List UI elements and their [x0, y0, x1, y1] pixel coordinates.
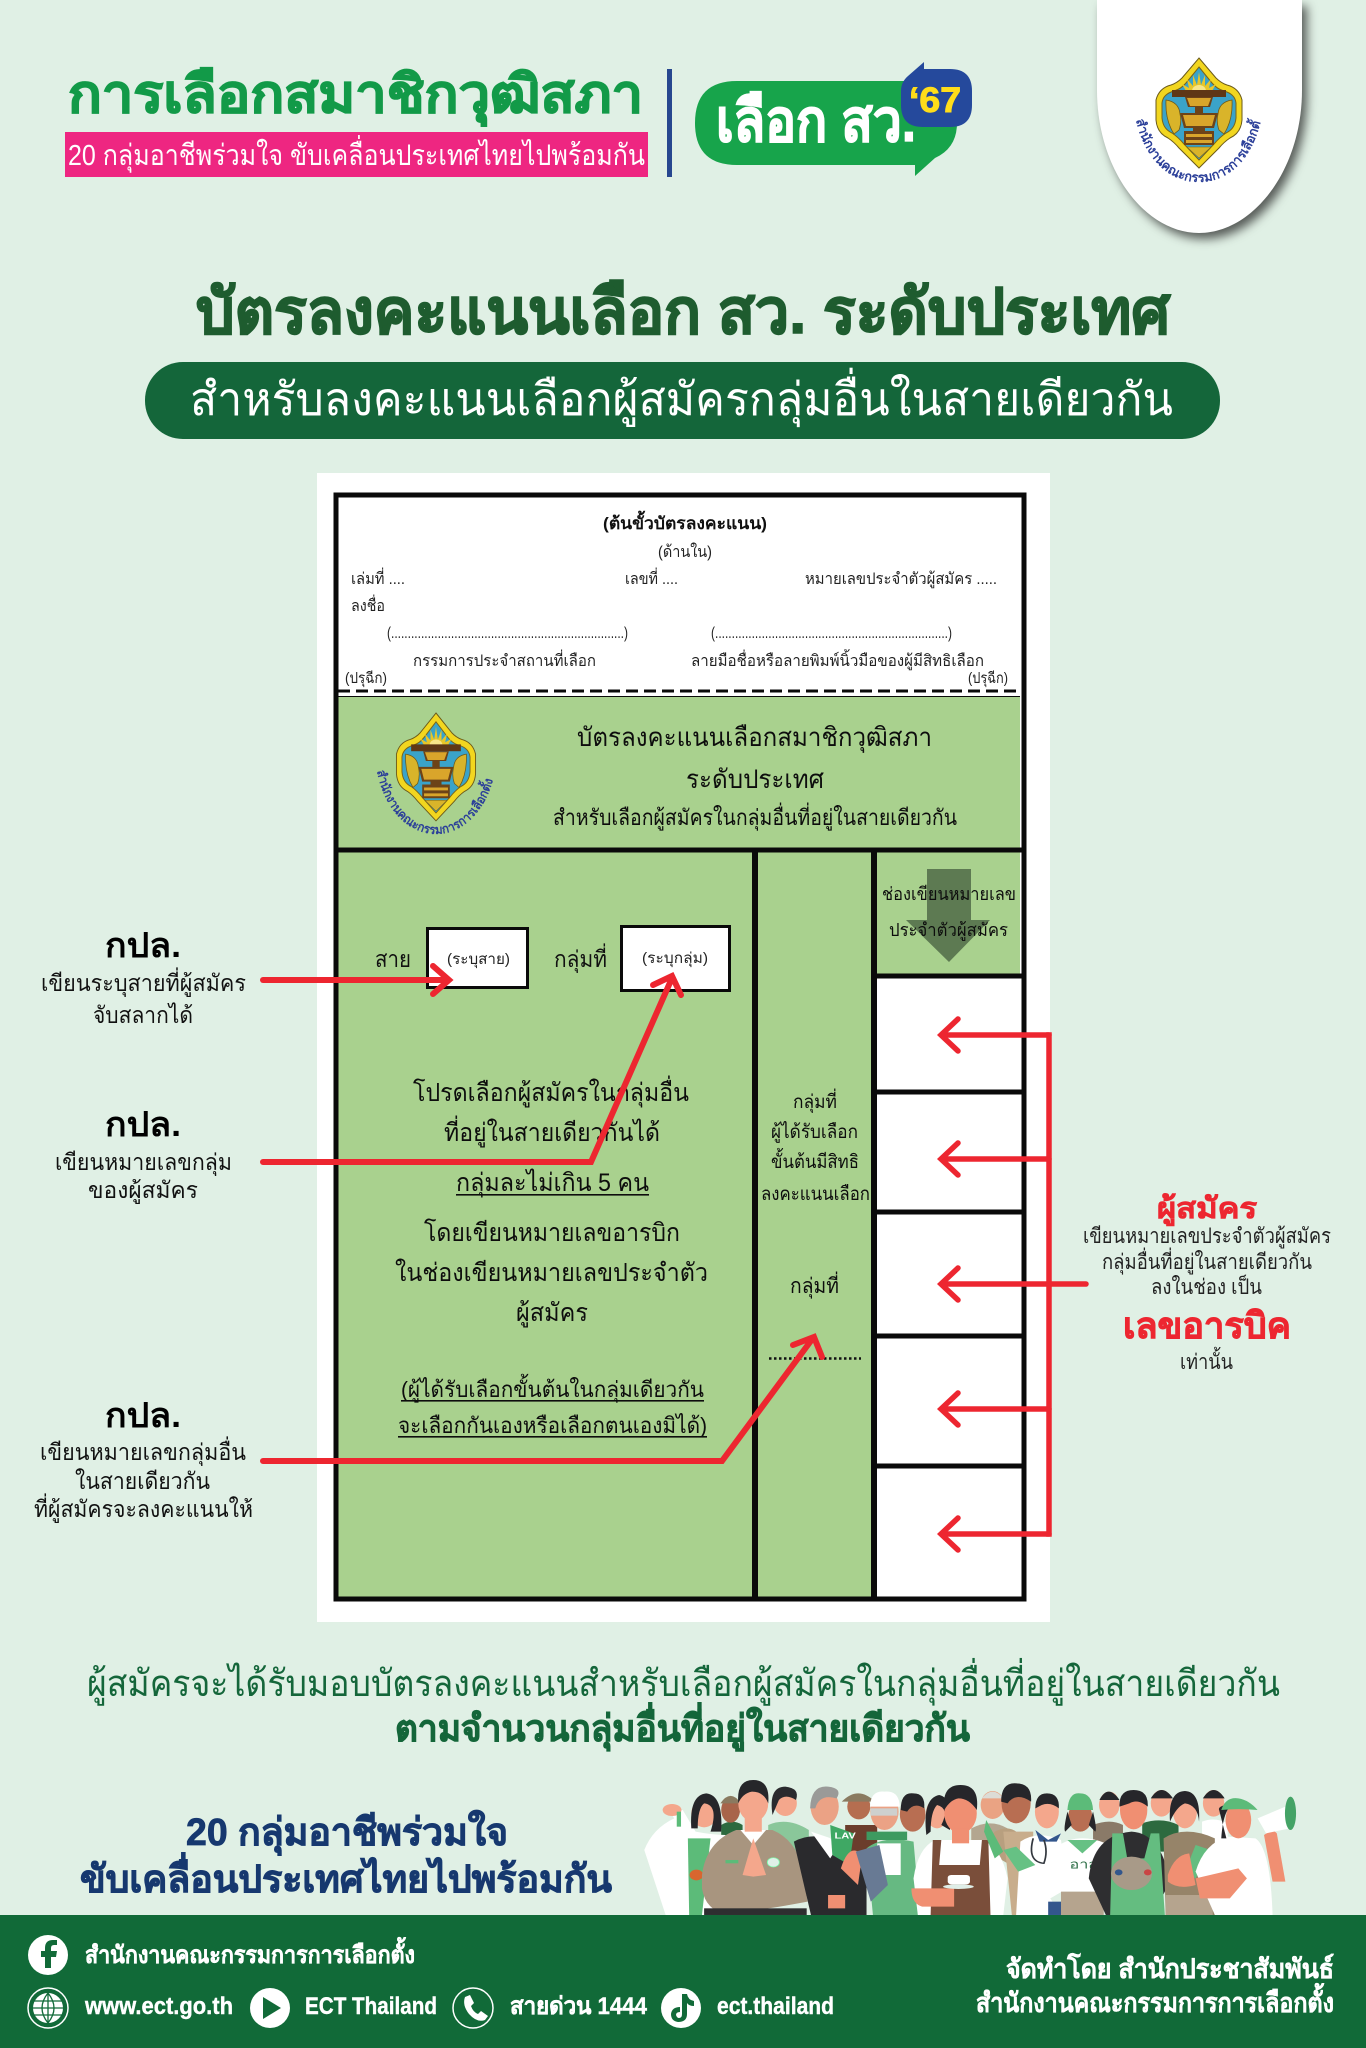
ballot title: บัตรลงคะแนนเลือกสมาชิกวุฒิสภา: [577, 722, 932, 753]
ballot stub text: เลขที่ ....: [625, 567, 678, 588]
badge: เลือก สว. '67: ‘67: [909, 81, 961, 120]
instructions text: (ผู้ได้รับเลือกขั้นต้นในกลุ่มเดียวกัน: [401, 1374, 704, 1403]
header subtitle bar: 20 กลุ่มอาชีพร่วมใจ ขับเคลื่อนประเทศไทยไปพร้อมกัน: [68, 135, 645, 173]
middle column text: กลุ่มที่: [793, 1088, 837, 1114]
main heading: บัตรลงคะแนนเลือก สว. ระดับประเทศ: [196, 278, 1172, 347]
callout: กปล. กลุ่ม: กปล.: [105, 1106, 181, 1144]
column header with arrow: [882, 869, 1016, 962]
ballot outer frame: [336, 495, 1024, 1599]
middle column text: ขั้นต้นมีสิทธิ: [771, 1148, 859, 1173]
footer: hotline: สายด่วน 1444: [510, 1993, 648, 2020]
header title: การเลือกสมาชิกวุฒิสภา: [68, 66, 643, 127]
callout: ผู้สมัคร: ลงในช่อง เป็น: [1151, 1273, 1262, 1299]
callout: กปล. กลุ่ม: เขียนหมายเลขกลุ่ม: [55, 1149, 232, 1176]
logo shield: [1094, 0, 1315, 246]
ballot title: [553, 722, 957, 831]
ballot stub text: (ด้านใน): [658, 542, 712, 561]
ballot stub text: (ปรุฉีก): [345, 670, 387, 688]
instructions text: โปรดเลือกผู้สมัครในกลุ่มอื่น: [413, 1075, 689, 1108]
field: กลุ่มที่: (ระบุกลุ่ม): [642, 950, 708, 968]
ballot title: สำหรับเลือกผู้สมัครในกลุ่มอื่นที่อยู่ในสายเดียวกัน: [553, 802, 957, 831]
instructions text: ที่อยู่ในสายเดียวกันได้: [444, 1115, 660, 1148]
instructions text: กลุ่มละไม่เกิน 5 คน: [456, 1168, 649, 1198]
callout: กปล. กลุ่มอื่น: ที่ผู้สมัครจะลงคะแนนให้: [34, 1493, 253, 1523]
arrows: candidate number boxes: [941, 1019, 1086, 1550]
ballot stub text: (ต้นขั้วบัตรลงคะแนน): [603, 510, 767, 533]
icon: ballot emblem: [377, 712, 493, 834]
doctor: [1003, 1793, 1067, 1915]
arrow: กลุ่มอื่น: [263, 1337, 822, 1461]
callout: ผู้สมัคร: เลขอารบิค: [1123, 1305, 1291, 1346]
ballot stub text: ลายมือชื่อหรือลายพิมพ์นิ้วมือของผู้มีสิทธิเลือก: [691, 649, 984, 671]
slogan: ขับเคลื่อนประเทศไทยไปพร้อมกัน: [80, 1852, 612, 1901]
header divider: [667, 69, 672, 177]
instructions text: [395, 1075, 708, 1438]
callout: ผู้สมัคร: กลุ่มอื่นที่อยู่ในสายเดียวกัน: [1102, 1247, 1312, 1275]
arrow: สาย: [263, 966, 449, 994]
instructions text: จะเลือกกันเองหรือเลือกตนเองมิได้): [398, 1413, 707, 1438]
footer: hotline: [453, 1988, 648, 2028]
field: สาย: (ระบุสาย): [447, 951, 510, 969]
footer: youtube: [250, 1988, 437, 2028]
ballot rules: [338, 691, 1022, 1598]
ballot stub text: เล่มที่ ....: [351, 567, 405, 588]
sub heading pill: สำหรับลงคะแนนเลือกผู้สมัครกลุ่มอื่นในสายเดียวกัน: [190, 367, 1173, 428]
slogan: 20 กลุ่มอาชีพร่วมใจ: [186, 1810, 508, 1856]
ballot stub text: (......................................................................): [711, 625, 952, 642]
hard hat worker: [856, 1792, 920, 1915]
footer: tiktok: [661, 1988, 834, 2028]
callout: กปล. กลุ่มอื่น: กปล.: [105, 1397, 181, 1435]
footer: website: [28, 1988, 233, 2028]
ballot stub text: (ปรุฉีก): [968, 670, 1008, 688]
footer: tiktok: ect.thailand: [717, 1993, 834, 2020]
badge: เลือก สว. '67: เลือก สว.: [716, 89, 916, 154]
arrow: กลุ่ม: [263, 976, 681, 1162]
ballot title: ระดับประเทศ: [686, 764, 824, 794]
officer woman: [1164, 1791, 1215, 1915]
bottom note: ผู้สมัครจะได้รับมอบบัตรลงคะแนนสำหรับเลือกผู้สมัครในกลุ่มอื่นที่อยู่ในสายเดียวกัน: [87, 1657, 1280, 1706]
ballot green fills: [338, 697, 1020, 1598]
senior man in black: LAV: [834, 1831, 856, 1841]
footer: facebook: [28, 1935, 415, 1975]
icon: ballot emblem: สำนักงานคณะกรรมการการเลือกตั้ง: [377, 770, 493, 834]
field: กลุ่มที่: [554, 926, 730, 990]
back row: [720, 1787, 1228, 1855]
middle column text: ผู้ได้รับเลือก: [771, 1121, 858, 1143]
footer band: [0, 1915, 1366, 2048]
footer: website: www.ect.go.th: [84, 1993, 233, 2020]
callout: ผู้สมัคร: ผู้สมัคร: [1157, 1193, 1257, 1226]
callout: กปล. สาย: [41, 927, 246, 1028]
sub heading pill: [145, 362, 1220, 439]
lab coat woman: [644, 1793, 725, 1915]
callout: กปล. กลุ่มอื่น: [34, 1397, 253, 1523]
ballot stub text: กรรมการประจำสถานที่เลือก: [413, 649, 596, 670]
callout: กปล. กลุ่ม: ของผู้สมัคร: [88, 1177, 198, 1204]
field: สาย: [375, 928, 528, 988]
ballot stub text: ลงชื่อ: [351, 594, 385, 615]
footer: organiser credit: [976, 1952, 1334, 2018]
bottom note: [87, 1657, 1280, 1752]
field: สาย: สาย: [375, 946, 411, 972]
slogan: [80, 1810, 612, 1901]
barista: [911, 1785, 1008, 1915]
callout: ผู้สมัคร: เท่านั้น: [1180, 1347, 1233, 1374]
badge: เลือก สว. '67: [695, 62, 972, 176]
footer: organiser credit: จัดทำโดย สำนักประชาสัมพันธ์: [1006, 1952, 1334, 1984]
icon: election commission emblem: [1136, 57, 1261, 182]
footer: youtube: ECT Thailand: [305, 1993, 437, 2020]
megaphone woman: [1196, 1797, 1296, 1915]
senior man in black: [794, 1787, 867, 1915]
instructions text: โดยเขียนหมายเลขอารบิก: [424, 1218, 680, 1247]
suit man praying: [702, 1780, 808, 1915]
artist with apron: [1089, 1790, 1170, 1915]
footer: facebook: สำนักงานคณะกรรมการการเลือกตั้ง: [85, 1936, 415, 1969]
column header with arrow: ช่องเขียนหมายเลข: [882, 884, 1016, 904]
ballot stub text: (......................................................................): [387, 625, 628, 642]
middle column text: [761, 1088, 870, 1358]
illustration: occupational group people: [644, 1780, 1296, 1915]
callout: ผู้สมัคร: เขียนหมายเลขประจำตัวผู้สมัคร: [1083, 1225, 1331, 1249]
callout: กปล. กลุ่มอื่น: ในสายเดียวกัน: [75, 1468, 210, 1494]
field: กลุ่มที่: กลุ่มที่: [554, 943, 607, 973]
instructions text: ในช่องเขียนหมายเลขประจำตัว: [395, 1258, 708, 1287]
middle column text: ลงคะแนนเลือก: [761, 1184, 870, 1205]
callout: กปล. กลุ่ม: [55, 1106, 232, 1204]
volunteer with cap: [1057, 1793, 1107, 1915]
callout: กปล. สาย: กปล.: [105, 927, 181, 965]
callout: กปล. สาย: เขียนระบุสายที่ผู้สมัคร: [41, 967, 246, 997]
bottom note: ตามจำนวนกลุ่มอื่นที่อยู่ในสายเดียวกัน: [395, 1702, 970, 1752]
callout: กปล. สาย: จับสลากได้: [93, 1002, 193, 1028]
volunteer with cap: อาสา: [1070, 1858, 1107, 1872]
callout: ผู้สมัคร: [1083, 1193, 1331, 1374]
ballot stub text: [345, 510, 1008, 688]
panel: ballot card: [317, 473, 1050, 1622]
middle column text: กลุ่มที่: [790, 1271, 839, 1299]
column header with arrow: ประจำตัวผู้สมัคร: [889, 920, 1008, 941]
header subtitle bar: [65, 132, 648, 177]
dark shirt men: [900, 1783, 1033, 1915]
ballot stub text: หมายเลขประจำตัวผู้สมัคร .....: [805, 570, 997, 589]
instructions text: ผู้สมัคร: [516, 1299, 588, 1328]
callout: กปล. กลุ่มอื่น: เขียนหมายเลขกลุ่มอื่น: [40, 1436, 246, 1466]
